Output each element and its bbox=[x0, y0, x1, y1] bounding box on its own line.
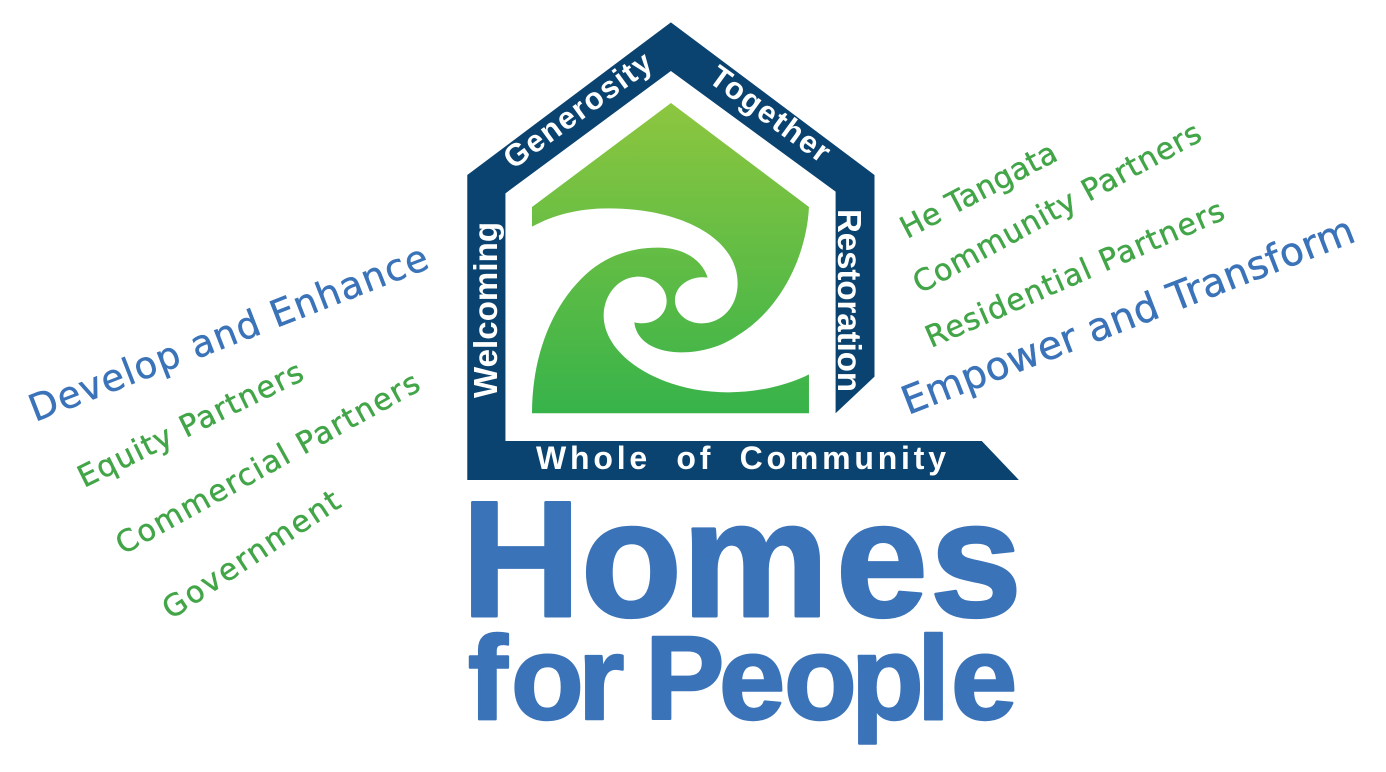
text: Residential Partners: Residential Partners bbox=[920, 193, 1230, 355]
right word group bbox=[894, 116, 1361, 424]
text: Government: Government bbox=[156, 483, 347, 627]
left word group bbox=[23, 236, 434, 627]
label: Whole of Community: Whole of Community bbox=[536, 440, 946, 476]
title line: Homes: Homes bbox=[462, 467, 1022, 651]
text: Equity Partners: Equity Partners bbox=[72, 355, 309, 495]
house outline bbox=[467, 22, 1019, 480]
label: Welcoming: Welcoming bbox=[467, 222, 504, 398]
text: He Tangata: He Tangata bbox=[894, 135, 1063, 246]
panel: house logo bbox=[467, 22, 1019, 480]
label: Generosity: Generosity bbox=[497, 44, 659, 176]
title: Homes for People bbox=[462, 467, 1022, 745]
icon: green koru house bbox=[532, 103, 809, 413]
heading: Develop and Enhance: Develop and Enhance bbox=[23, 236, 434, 430]
text: Community Partners: Community Partners bbox=[907, 116, 1207, 301]
heading: Empower and Transform: Empower and Transform bbox=[895, 208, 1361, 424]
text: Commercial Partners: Commercial Partners bbox=[110, 366, 426, 562]
label: Together: Together bbox=[703, 58, 838, 170]
label: Restoration: Restoration bbox=[831, 209, 868, 392]
title line: for People: for People bbox=[468, 612, 1017, 745]
